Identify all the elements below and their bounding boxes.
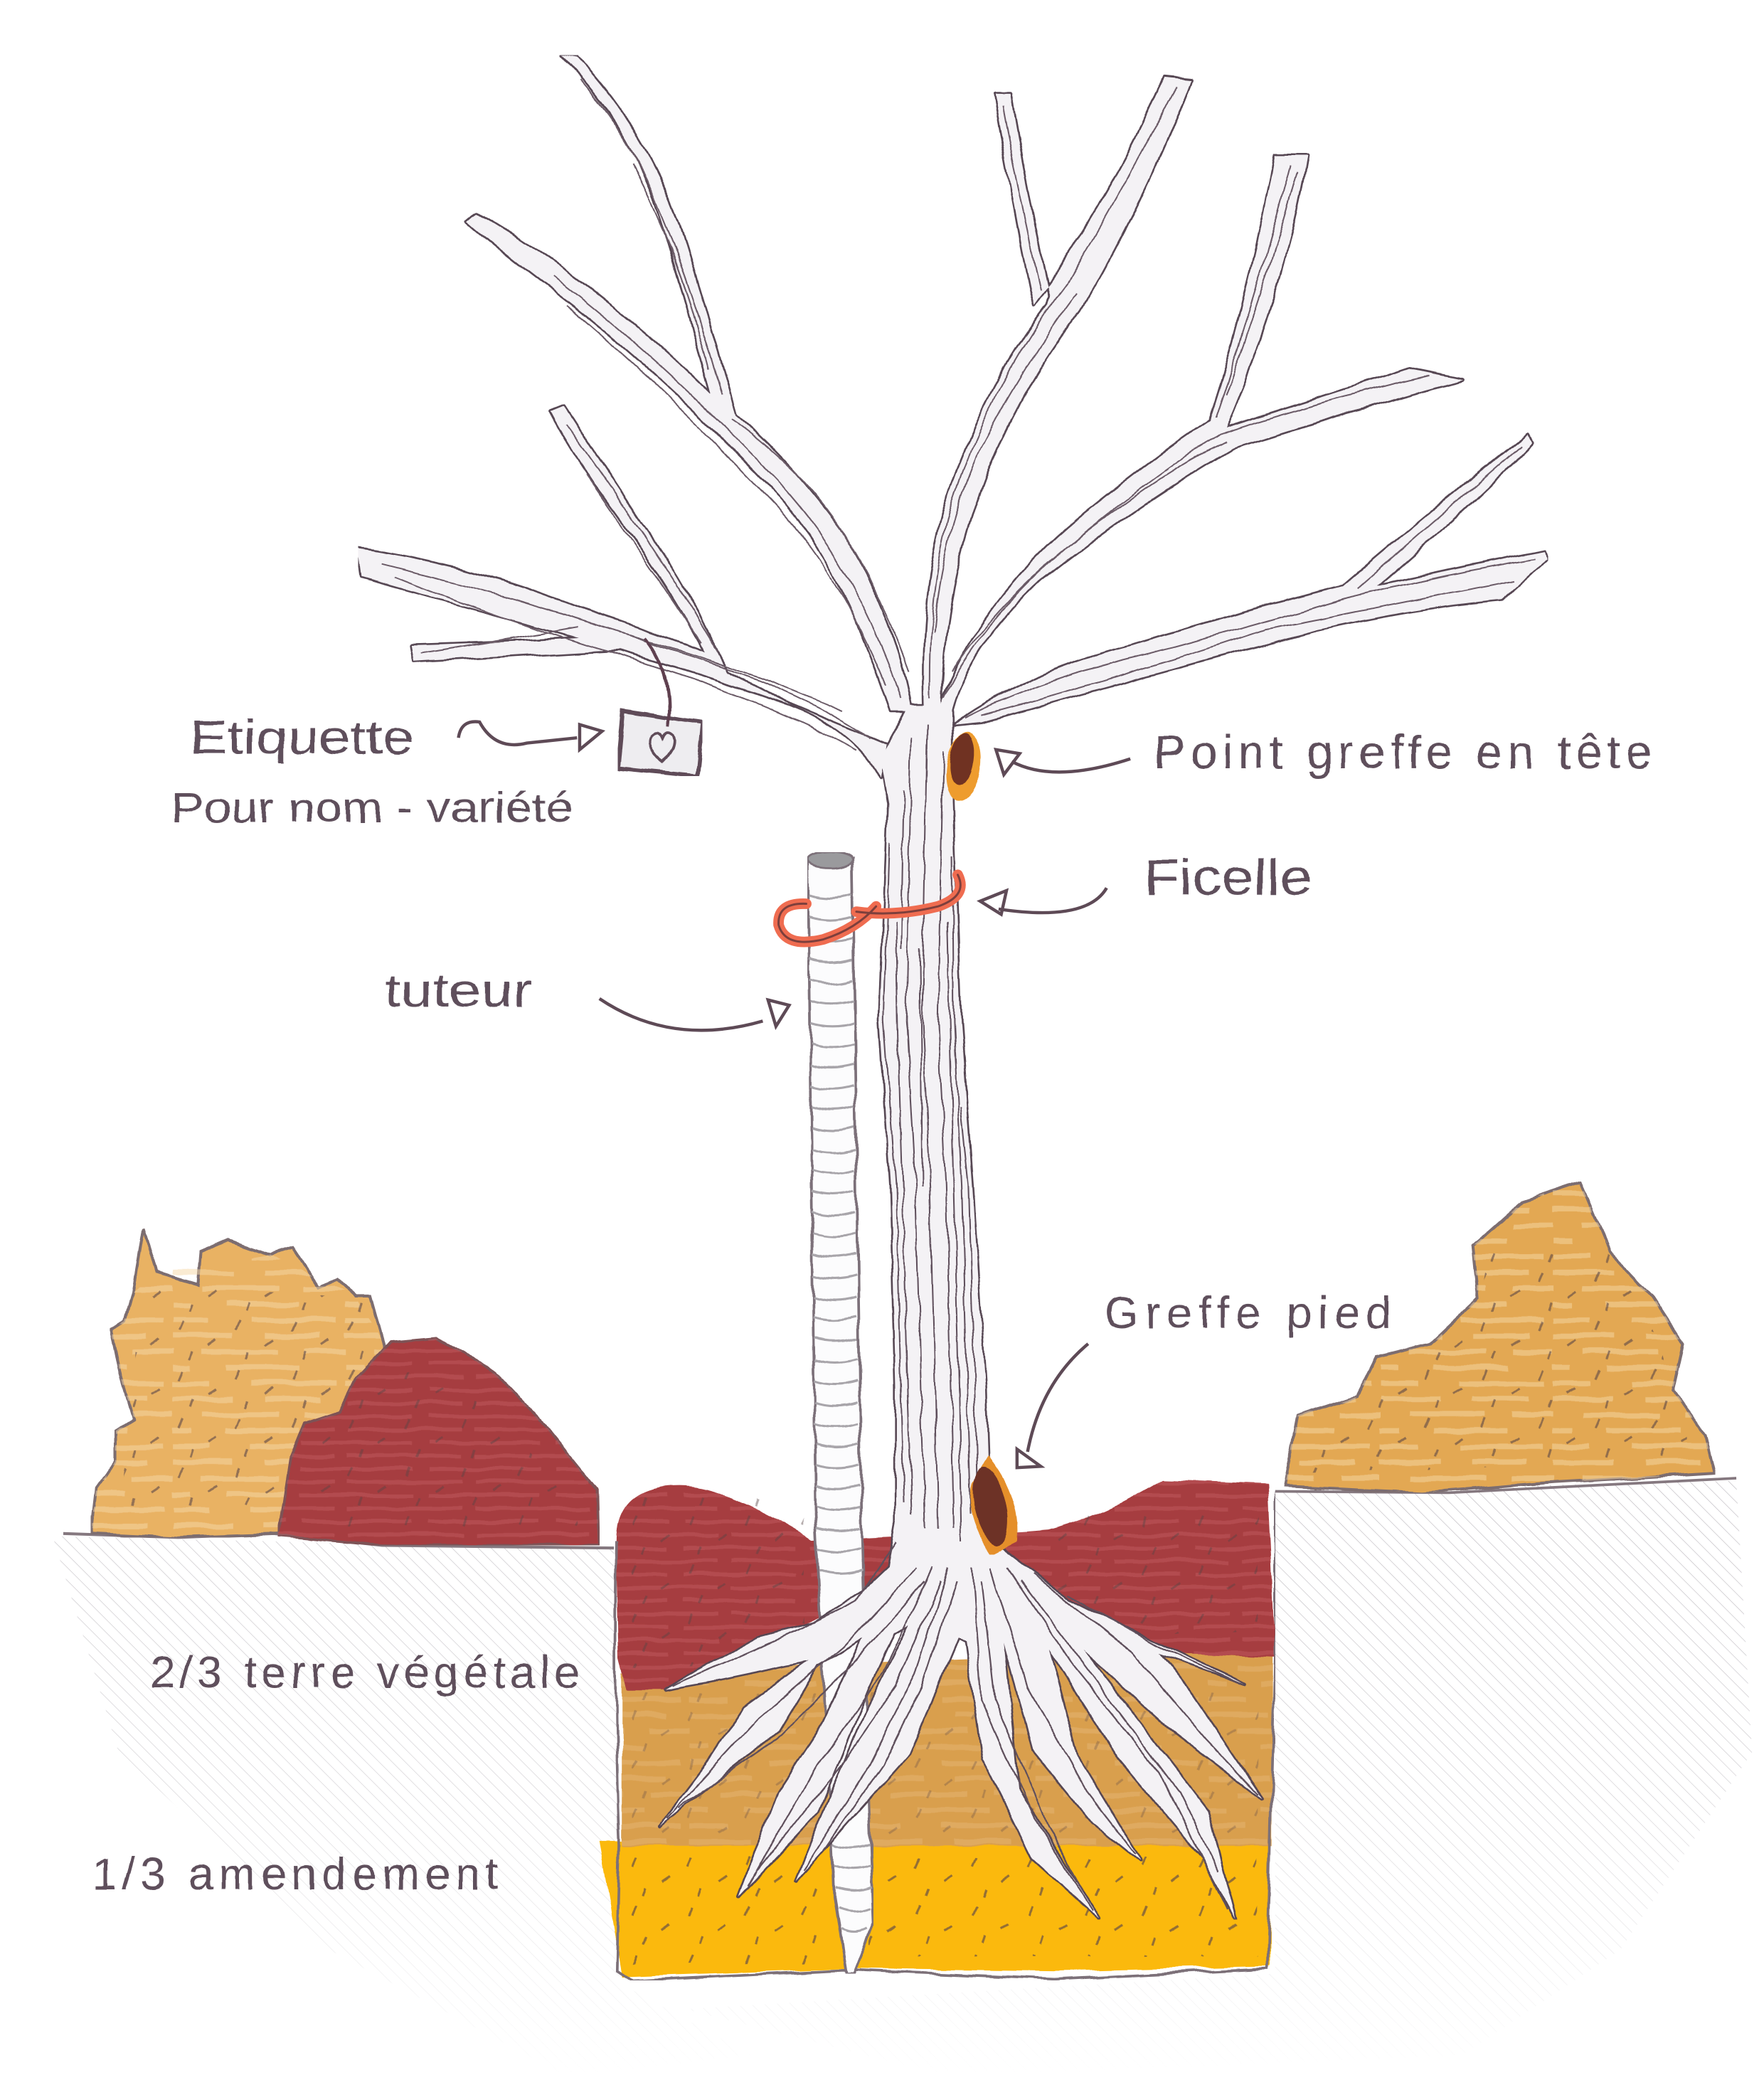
pile: red topsoil left (278, 1337, 600, 1545)
arrow: etiquette (459, 721, 602, 750)
label: point greffe en tete: Point greffe en tête (1154, 726, 1652, 779)
label: ficelle: Ficelle (1144, 849, 1312, 906)
tag heart (650, 733, 674, 763)
label: terre vegetale: 2/3 terre végétale (150, 1647, 580, 1697)
ground line right (1275, 1478, 1736, 1492)
arrow: point greffe (996, 750, 1130, 775)
ground line left (63, 1534, 614, 1548)
layer: red topsoil mound (617, 1480, 1275, 1690)
tag string (646, 637, 669, 727)
string tie (779, 875, 960, 942)
graft point (foot) (967, 1456, 1017, 1554)
arrow: ficelle (980, 888, 1107, 914)
stake top (807, 852, 852, 869)
pile: orange soil left (91, 1228, 395, 1537)
planting hole (600, 1480, 1275, 1980)
layer: orange plant soil (622, 1647, 1272, 1846)
label: etiquette: Etiquette (190, 711, 414, 764)
layer: amendment yellow (600, 1840, 1270, 1976)
ground hatching left (54, 1537, 654, 2017)
bark lines: branches (382, 79, 1535, 751)
arrow: tuteur (600, 999, 789, 1030)
label: pour nom-variete: Pour nom - variété (171, 784, 573, 832)
ground hatching right (685, 1481, 1752, 2075)
bark lines: trunk (884, 725, 977, 1541)
stake rings (809, 896, 872, 1932)
label: amendement: 1/3 amendement (92, 1850, 499, 1899)
stake (807, 852, 873, 1973)
label tag (618, 637, 702, 776)
arrow: greffe pied (1017, 1344, 1088, 1468)
tree (358, 55, 1548, 1919)
bark lines: roots (666, 1541, 1258, 1910)
graft point (crown) (941, 729, 985, 805)
label: tuteur: tuteur (385, 965, 532, 1017)
hole outline (616, 1486, 1275, 1980)
pile: orange soil right (1285, 1182, 1715, 1492)
label: greffe pied: Greffe pied (1104, 1288, 1391, 1338)
